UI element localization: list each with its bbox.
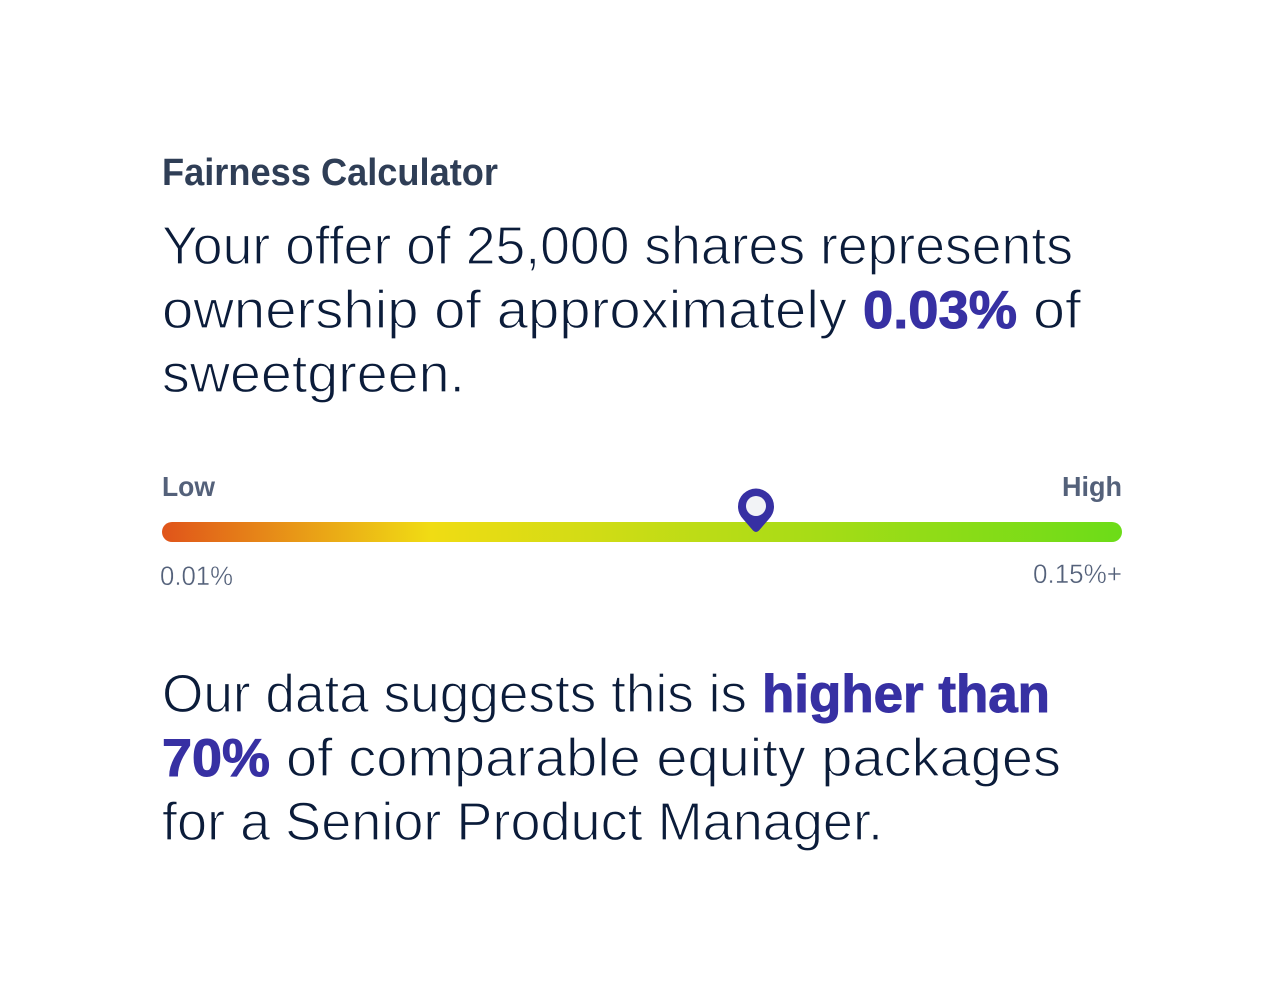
- text block: offer summary: [162, 216, 1082, 404]
- text block: comparison result: of comparable equity packages: [286, 728, 1061, 788]
- text block: offer summary: 0.03%: [863, 281, 1017, 340]
- label: maximum value: 0.15%+: [1033, 559, 1122, 589]
- text block: offer summary: ownership of approximately: [162, 280, 847, 340]
- title: Fairness Calculator: [162, 152, 498, 194]
- text block: comparison result: for a Senior Product Manager.: [162, 792, 883, 852]
- icon: map pin marker: [738, 489, 774, 532]
- text block: offer summary: Your offer of 25,000 shares represents: [162, 216, 1073, 276]
- label: high: High: [1062, 471, 1122, 502]
- gauge: ownership range: [160, 471, 1122, 591]
- text block: comparison result: Our data suggests this is: [162, 664, 747, 724]
- text block: offer summary: sweetgreen.: [162, 344, 465, 404]
- text block: offer summary: of: [1033, 280, 1082, 340]
- text block: comparison result: [162, 664, 1061, 852]
- label: minimum value: 0.01%: [160, 561, 233, 591]
- label: low: Low: [162, 471, 215, 502]
- text block: comparison result: higher than: [762, 665, 1050, 724]
- text block: comparison result: 70%: [162, 729, 270, 788]
- gradient bar: [162, 522, 1122, 542]
